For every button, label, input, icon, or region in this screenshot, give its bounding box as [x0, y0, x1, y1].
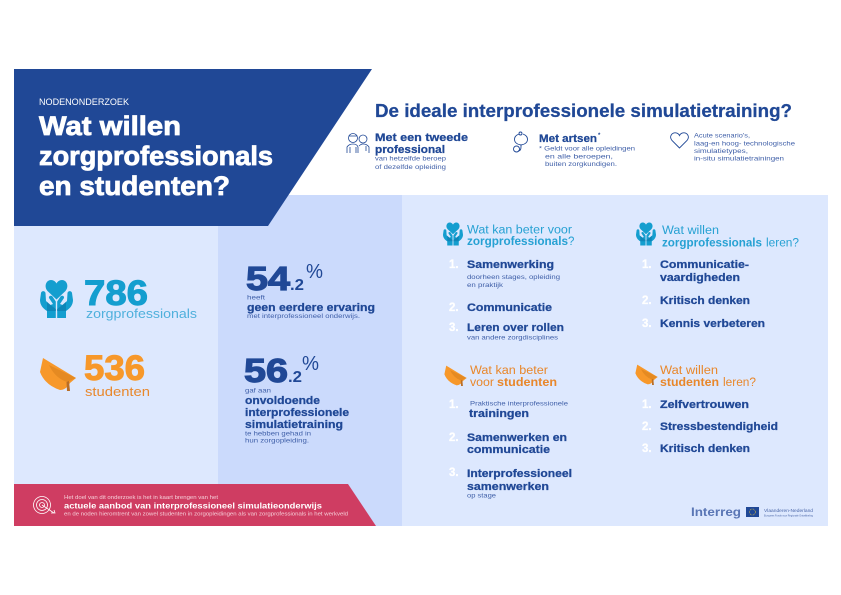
stat: 536 students: studenten	[85, 384, 150, 399]
panel heading: studenten	[660, 377, 719, 389]
panel heading	[470, 365, 557, 389]
icon: graduation cap	[444, 366, 467, 386]
panel: what students want to learn: 2.	[642, 421, 652, 433]
panel: what can improve for care professionals: 1.	[449, 259, 459, 271]
logo: Interreg	[691, 507, 814, 519]
panel: what can improve for students: trainingen	[469, 408, 529, 420]
background panel: middle column	[218, 195, 402, 526]
panel heading: ?	[568, 236, 574, 248]
panel heading: studenten	[497, 377, 557, 389]
panel: what students want to learn: 3.	[642, 443, 652, 455]
panel heading	[660, 365, 756, 389]
panel: what can improve for care professionals: doorheen stages, opleiding	[467, 274, 560, 281]
feature: with physicians: buiten zorgkundigen.	[545, 161, 617, 168]
logo: Interreg: Vlaanderen-Nederland	[764, 508, 814, 513]
panel: what students want to learn	[635, 365, 778, 455]
feature: with physicians: * Geldt voor alle opleidingen	[539, 146, 635, 152]
panel: what can improve for care professionals: Communicatie	[467, 302, 552, 314]
stat: 56.2 percent: te hebben gehad in	[245, 430, 311, 438]
panel: what care professionals want to learn: Kritisch denken	[660, 295, 750, 307]
stat: 54.2 percent: geen eerdere ervaring	[247, 302, 375, 314]
panel: what can improve for care professionals: Samenwerking	[467, 259, 554, 271]
background panel: left column	[14, 226, 218, 526]
stat: 56.2 percent: interprofessionele	[245, 407, 349, 419]
feature: scenarios: in-situ simulatietrainingen	[694, 156, 784, 162]
panel: what care professionals want to learn: Kennis verbeteren	[660, 318, 765, 330]
panel heading: Wat kan beter	[470, 365, 548, 377]
heading: ideal training: De ideale interprofessionele simulatietraining?	[375, 100, 792, 121]
title text	[39, 111, 273, 201]
stat: 536 students: 536	[84, 349, 145, 388]
eyebrow label: NODENONDERZOEK	[39, 97, 129, 107]
feature: second professional	[375, 132, 468, 171]
stat: 56.2 percent: hun zorgopleiding.	[245, 438, 309, 444]
background panel: right column	[402, 195, 828, 526]
feature: with physicians: *	[598, 133, 601, 139]
feature: with physicians	[539, 133, 635, 168]
stat: 56.2 percent	[244, 352, 349, 444]
feature: second professional: van hetzelfde beroep	[375, 156, 446, 162]
panel: what can improve for care professionals	[443, 222, 574, 342]
stat: 54.2 percent: .2	[290, 277, 304, 294]
icon: caring hands large	[40, 280, 73, 318]
stat: 54.2 percent: 54	[246, 260, 291, 297]
panel: what can improve for students: communicatie	[467, 444, 550, 456]
panel heading: Wat kan beter voor	[467, 224, 572, 236]
panel: what can improve for care professionals: Leren over rollen	[467, 322, 564, 334]
banner text: Het doel van dit onderzoek is het in kaart brengen van het	[64, 495, 219, 501]
panel: what can improve for students: op stage	[467, 492, 496, 500]
stat: 786 care professionals: zorgprofessionals	[86, 306, 198, 321]
callout: study goal banner	[14, 484, 376, 526]
panel: what care professionals want to learn	[636, 222, 799, 330]
title text: Wat willen	[39, 111, 181, 141]
stat: 54.2 percent: %	[306, 261, 323, 283]
icon: caring hands	[636, 222, 656, 246]
feature: scenarios	[694, 132, 795, 162]
panel heading: leren?	[766, 238, 799, 250]
panel heading: zorgprofessionals	[467, 236, 568, 248]
icon: graduation cap large	[40, 358, 76, 391]
feature: scenarios: laag-en hoog- technologische	[694, 140, 795, 148]
banner text: en de noden hieromtrent van zowel studenten in zorgopleidingen als van zorgprofessionals in het werkveld	[64, 512, 348, 518]
stat: 56.2 percent: %	[302, 353, 319, 375]
title text: en studenten?	[39, 171, 230, 201]
stat: 56.2 percent: simulatietraining	[245, 419, 343, 431]
panel: what students want to learn: Kritisch denken	[660, 443, 750, 455]
banner text	[64, 495, 348, 518]
panel: what care professionals want to learn: 3.	[642, 318, 652, 330]
panel: what students want to learn: 1.	[642, 399, 652, 411]
icon: two professionals	[347, 134, 369, 153]
feature: second professional: professional	[375, 144, 445, 156]
panel: what can improve for care professionals: 3.	[449, 322, 459, 334]
stat: 536 students	[84, 349, 150, 399]
feature: scenarios: Acute scenario's,	[694, 132, 750, 140]
panel: what care professionals want to learn: Communicatie-	[660, 259, 749, 271]
logo: Interreg: Interreg	[691, 507, 741, 519]
stat: 56.2 percent: 56	[244, 352, 288, 389]
stat: 54.2 percent	[246, 260, 375, 320]
stat: 786 care professionals: 786	[84, 274, 148, 313]
icon: stethoscope	[514, 132, 528, 152]
panel heading: zorgprofessionals	[662, 238, 762, 250]
icon: graduation cap	[635, 365, 658, 385]
panel heading: Wat willen	[662, 225, 719, 237]
panel: what can improve for care professionals: van andere zorgdisciplines	[467, 334, 559, 342]
title banner	[14, 69, 372, 226]
banner text: actuele aanbod van interprofessioneel simulatieonderwijs	[64, 500, 322, 510]
panel heading: leren?	[723, 377, 756, 389]
panel heading: voor	[470, 377, 494, 389]
stat: 56.2 percent: gaf aan	[245, 388, 271, 394]
stat: 786 care professionals	[84, 274, 198, 321]
stat: 54.2 percent: met interprofessioneel onderwijs.	[247, 313, 360, 320]
panel: what can improve for care professionals: 2.	[449, 302, 459, 314]
logo: Interreg: Europees Fonds voor Regionale Ontwikkeling	[764, 514, 813, 518]
panel: what can improve for students: Praktische interprofessionele	[470, 400, 568, 408]
panel: what can improve for students: 1.	[449, 399, 459, 411]
icon: target	[34, 496, 55, 514]
panel heading	[467, 224, 574, 248]
stat: 54.2 percent: heeft	[247, 294, 265, 302]
stat: 56.2 percent: .2	[288, 369, 302, 386]
panel: what can improve for students: samenwerken	[467, 481, 549, 493]
panel: what can improve for students	[444, 365, 572, 500]
panel: what students want to learn: Zelfvertrouwen	[660, 399, 749, 411]
panel: what can improve for students: 2.	[449, 432, 459, 444]
feature: second professional: Met een tweede	[375, 132, 468, 144]
icon: heart outline	[671, 133, 688, 148]
panel: what can improve for students: 3.	[449, 467, 459, 479]
panel heading	[662, 225, 799, 250]
panel: what care professionals want to learn: vaardigheden	[660, 272, 740, 284]
stat: 56.2 percent: onvoldoende	[245, 395, 320, 407]
icon: caring hands	[443, 222, 463, 246]
panel: what care professionals want to learn: 2.	[642, 295, 652, 307]
feature: with physicians: Met artsen	[539, 133, 597, 145]
panel: what care professionals want to learn: 1.	[642, 259, 652, 271]
title text: zorgprofessionals	[39, 141, 273, 171]
feature: scenarios: simulatietypes,	[694, 148, 748, 155]
feature: with physicians: en alle beroepen,	[545, 154, 613, 160]
panel: what can improve for students: Interprofessioneel	[467, 468, 572, 480]
panel heading: Wat willen	[660, 365, 718, 377]
panel: what can improve for students: Samenwerken en	[467, 432, 567, 444]
panel: what students want to learn: Stressbestendigheid	[660, 421, 778, 433]
feature: second professional: of dezelfde opleiding	[375, 164, 446, 171]
panel: what can improve for care professionals: en praktijk	[467, 282, 504, 289]
